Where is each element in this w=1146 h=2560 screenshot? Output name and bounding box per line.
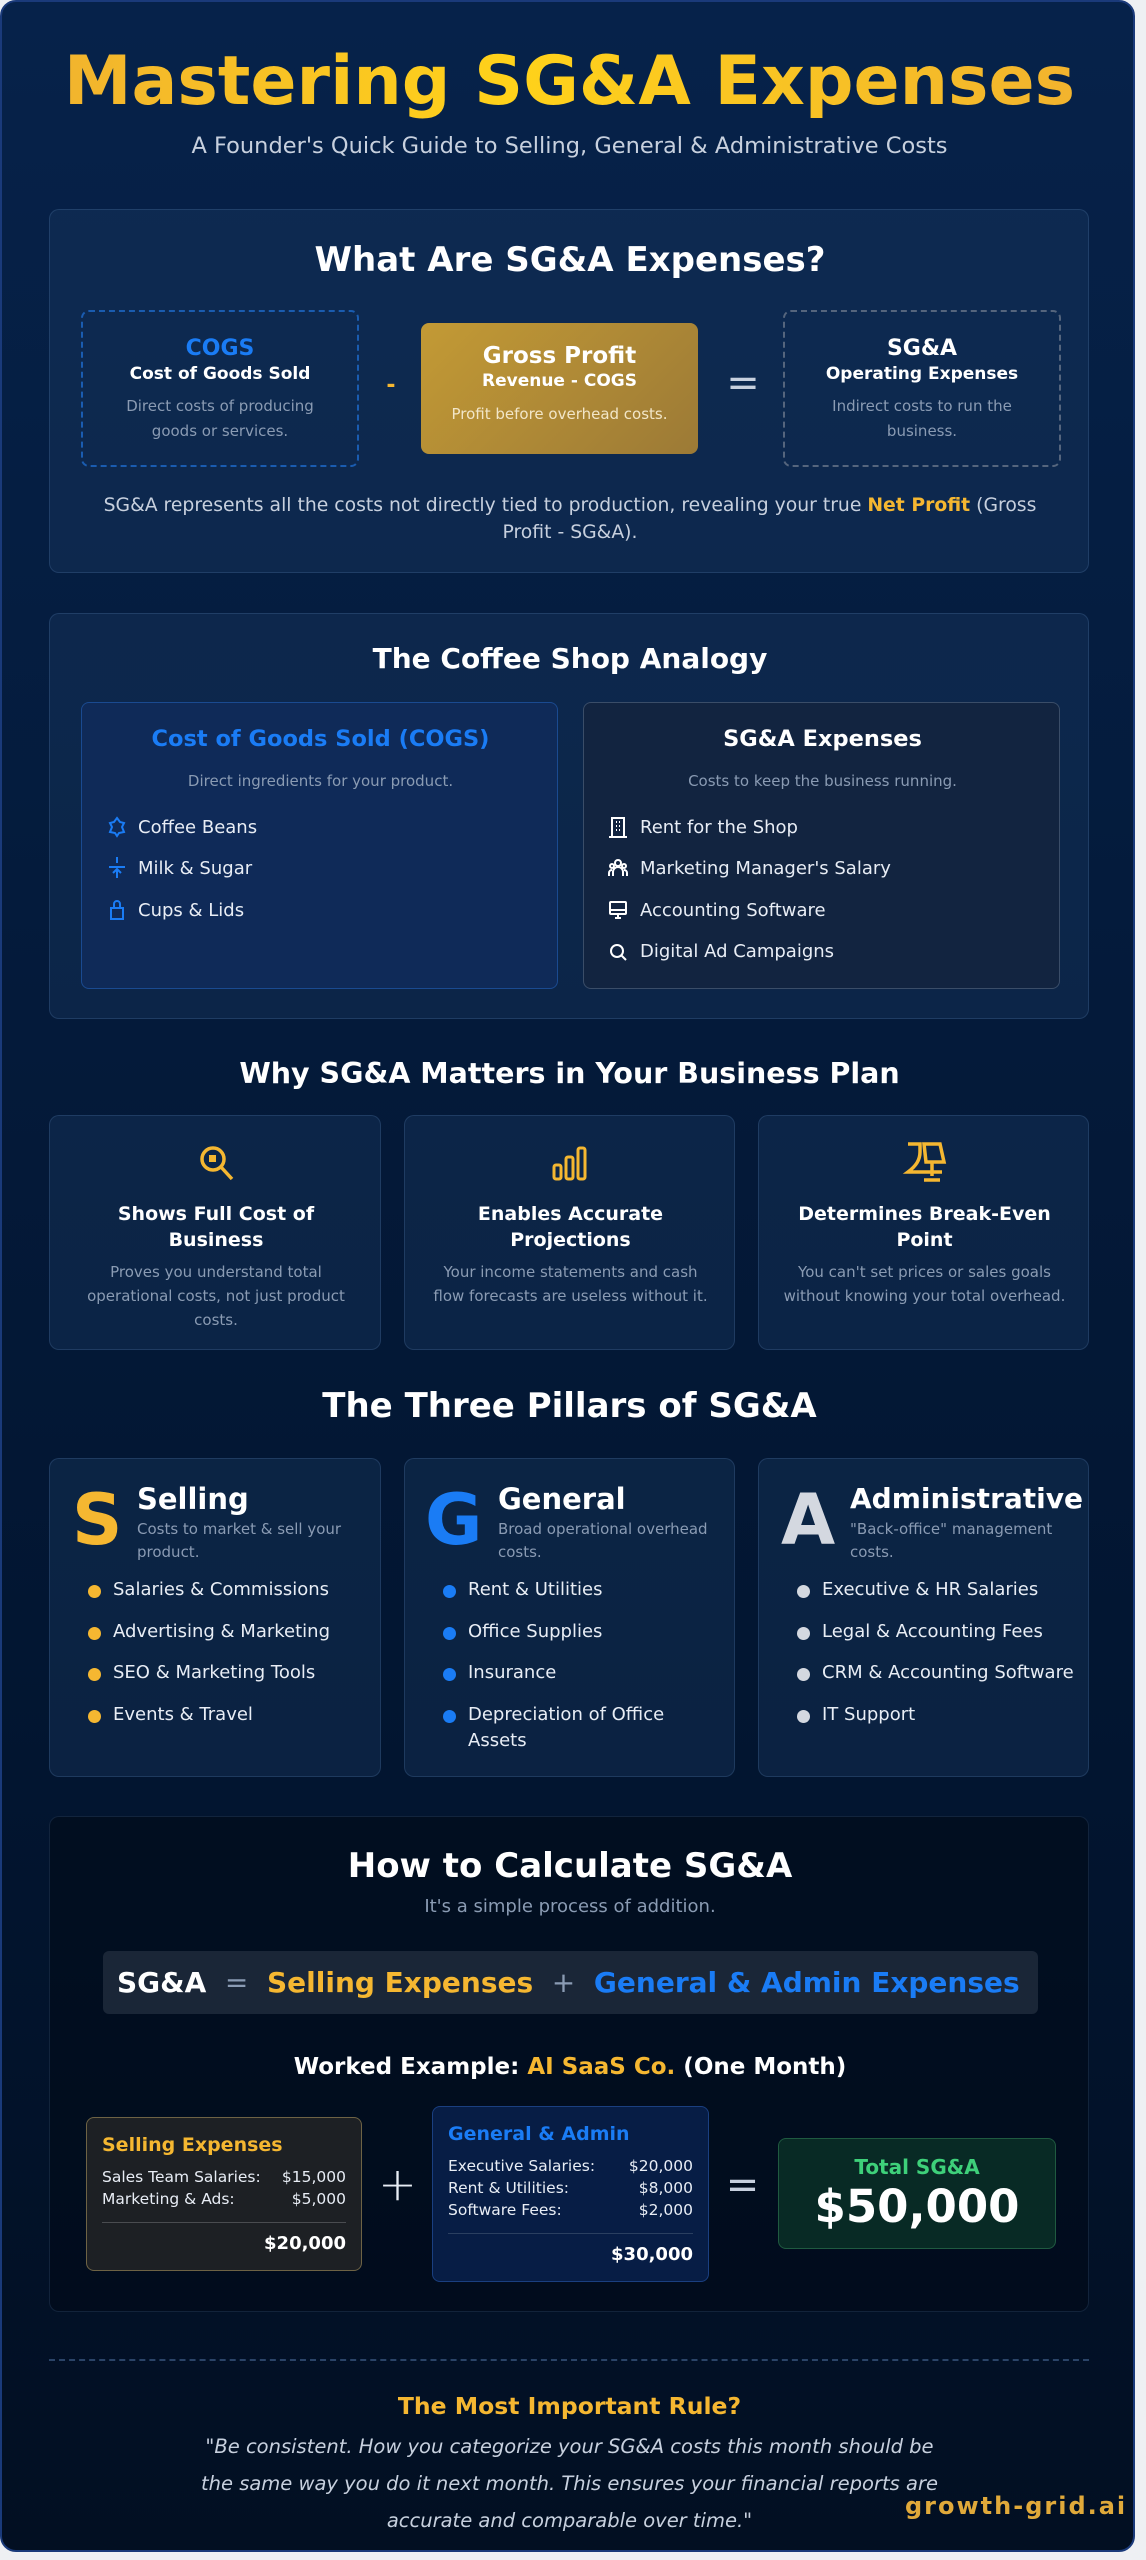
box: selling expenses: Sales Team Salaries: — [102, 2168, 261, 2186]
subtitle: A Founder's Quick Guide to Selling, General & Administrative Costs — [191, 133, 948, 159]
heading: How to Calculate SG&A — [348, 1846, 792, 1886]
box: COGS — [81, 310, 359, 467]
box: general & admin: $8,000 — [639, 2179, 693, 2197]
pillar: general: Office Supplies — [468, 1621, 602, 1642]
box: general & admin: Rent & Utilities: — [448, 2179, 569, 2197]
icon item: team: Marketing Manager's Salary — [640, 858, 891, 878]
box: SG&A: Operating Expenses — [826, 364, 1018, 384]
card: full cost — [49, 1115, 381, 1350]
explanation text: SG&A represents all the costs not directly tied to production, revealing your true Net Profit (Gross — [104, 495, 1036, 516]
panel: how to calculate — [49, 1816, 1089, 2312]
box: gross profit: Gross Profit — [483, 343, 636, 369]
pillar: general: G — [425, 1479, 482, 1561]
pillar: administrative: A — [781, 1479, 835, 1561]
pillar: selling: Advertising & Marketing — [113, 1621, 330, 1642]
card: break-even: You can't set prices or sales goals without knowing your total overhead. — [784, 1263, 1065, 1305]
icon item: coffee beans: Coffee Beans — [138, 816, 257, 838]
box: general & admin — [432, 2106, 709, 2282]
quote: "Be consistent. How you categorize your SG&A costs this month should be — [205, 2435, 934, 2458]
box: total: Total SG&A — [854, 2155, 980, 2179]
pillar: selling: SEO & Marketing Tools — [113, 1662, 315, 1683]
box: general & admin: Executive Salaries: — [448, 2157, 595, 2175]
sub-panel: COGS: Cost of Goods Sold (COGS) — [152, 726, 489, 752]
icon item: building: Rent for the Shop — [640, 816, 798, 838]
box: gross profit: Profit before overhead costs. — [451, 405, 668, 423]
rule heading: The Most Important Rule? — [398, 2392, 741, 2420]
quote — [201, 2435, 938, 2532]
icon: magnifier — [200, 1146, 234, 1180]
box: selling expenses: $20,000 — [264, 2233, 346, 2254]
heading: What Are SG&A Expenses? — [315, 240, 825, 280]
formula bar — [103, 1951, 1038, 2014]
box: total — [778, 2138, 1056, 2249]
minus: - — [386, 373, 396, 398]
sub-panel: SG&A — [583, 702, 1060, 989]
box: COGS: Direct costs of producing — [126, 397, 314, 415]
box: SG&A: Indirect costs to run the — [832, 397, 1012, 415]
equals: = — [726, 360, 760, 406]
plus: + — [378, 2157, 417, 2211]
icon item: search: Digital Ad Campaigns — [640, 940, 834, 962]
pillar: administrative: CRM & Accounting Software — [822, 1662, 1074, 1683]
pillar: administrative: "Back-office" management costs. — [850, 1520, 1052, 1561]
heading: why SG&A matters: Why SG&A Matters in Your Business Plan — [239, 1057, 900, 1090]
card: projections: Projections — [510, 1229, 631, 1251]
box: selling expenses — [86, 2117, 362, 2271]
box: gross profit — [421, 323, 698, 454]
pillar: general: General — [498, 1482, 626, 1516]
box: SG&A: business. — [887, 422, 957, 440]
box: general & admin: Software Fees: — [448, 2201, 562, 2219]
sub-panel: COGS: Direct ingredients for your product. — [188, 772, 453, 790]
box: COGS: Cost of Goods Sold — [130, 364, 310, 384]
sub-panel: COGS — [81, 702, 558, 989]
card: full cost: Proves you understand total operational costs, not just product costs. — [87, 1263, 345, 1329]
equals: = — [726, 2162, 759, 2208]
pillar: general: Insurance — [468, 1662, 556, 1683]
box: selling expenses: Selling Expenses — [102, 2134, 283, 2156]
brand: growth-grid.ai — [905, 2492, 1127, 2520]
box: general & admin: $2,000 — [639, 2201, 693, 2219]
box: selling expenses: Marketing & Ads: — [102, 2190, 235, 2208]
pillar: general: Rent & Utilities — [468, 1579, 602, 1600]
box: SG&A: SG&A — [887, 336, 957, 361]
pillar: selling: Costs to market & sell your product. — [137, 1520, 341, 1561]
sub-panel: SG&A: Costs to keep the business running. — [688, 772, 957, 790]
icon item: cups: Cups & Lids — [138, 900, 244, 920]
pillar: general — [404, 1458, 735, 1777]
panel: what are SG&A — [49, 209, 1089, 573]
pillar: administrative: Administrative — [850, 1482, 1083, 1515]
divider — [49, 2359, 1089, 2361]
heading: The Coffee Shop Analogy — [373, 642, 767, 675]
box: gross profit: Revenue - COGS — [482, 371, 637, 391]
box: general & admin: General & Admin — [448, 2123, 630, 2145]
icon item: monitor: Accounting Software — [640, 900, 826, 920]
panel: how to calculate: It's a simple process of addition. — [424, 1896, 716, 1917]
pillar: selling: Selling — [137, 1482, 249, 1516]
pillar: administrative: Legal & Accounting Fees — [822, 1621, 1043, 1642]
box: COGS: goods or services. — [152, 422, 288, 440]
panel: coffee shop analogy — [49, 613, 1089, 1019]
title: Mastering SG&A Expenses — [64, 42, 1075, 121]
box: selling expenses: $15,000 — [282, 2168, 346, 2186]
pillar: selling — [49, 1458, 381, 1777]
pillar: general: Depreciation of Office Assets — [468, 1704, 664, 1751]
card: projections: flow forecasts are useless without it. — [433, 1287, 708, 1305]
box: general & admin: $20,000 — [629, 2157, 693, 2175]
card: projections — [404, 1115, 735, 1350]
card: full cost: Business — [169, 1229, 263, 1251]
box: selling expenses: $5,000 — [292, 2190, 346, 2208]
card: break-even: Determines Break-Even — [798, 1203, 1051, 1225]
icon: scale — [902, 1142, 946, 1182]
card: projections: Your income statements and cash — [443, 1263, 698, 1281]
card: break-even — [758, 1115, 1089, 1350]
box: general & admin: $30,000 — [611, 2244, 693, 2265]
pillar: administrative: IT Support — [822, 1704, 915, 1725]
pillar: general: Broad operational overhead costs. — [498, 1520, 708, 1561]
quote: the same way you do it next month. This ensures your financial reports are — [201, 2472, 938, 2495]
explanation text — [104, 495, 1036, 543]
heading: three pillars: The Three Pillars of SG&A — [322, 1386, 817, 1426]
quote: accurate and comparable over time." — [387, 2509, 752, 2532]
worked example heading: Worked Example: AI SaaS Co. (One Month) — [294, 2054, 846, 2080]
card: full cost: Shows Full Cost of — [118, 1203, 314, 1225]
icon: bar chart — [552, 1146, 586, 1180]
explanation text: Profit - SG&A). — [502, 522, 637, 543]
pillar: administrative — [758, 1458, 1089, 1777]
formula bar: SG&A = Selling Expenses + General & Admin Expenses — [117, 1966, 1020, 1999]
pillar: selling: S — [72, 1479, 122, 1561]
icon item: milk: Milk & Sugar — [138, 858, 252, 878]
sub-panel: SG&A: SG&A Expenses — [723, 726, 922, 752]
box: total: $50,000 — [815, 2180, 1019, 2233]
box: SG&A — [783, 310, 1061, 467]
box: COGS: COGS — [186, 336, 254, 361]
pillar: selling: Events & Travel — [113, 1704, 253, 1725]
card: projections: Enables Accurate — [478, 1203, 663, 1225]
card: break-even: Point — [896, 1229, 953, 1251]
pillar: selling: Salaries & Commissions — [113, 1579, 329, 1600]
pillar: administrative: Executive & HR Salaries — [822, 1579, 1038, 1600]
